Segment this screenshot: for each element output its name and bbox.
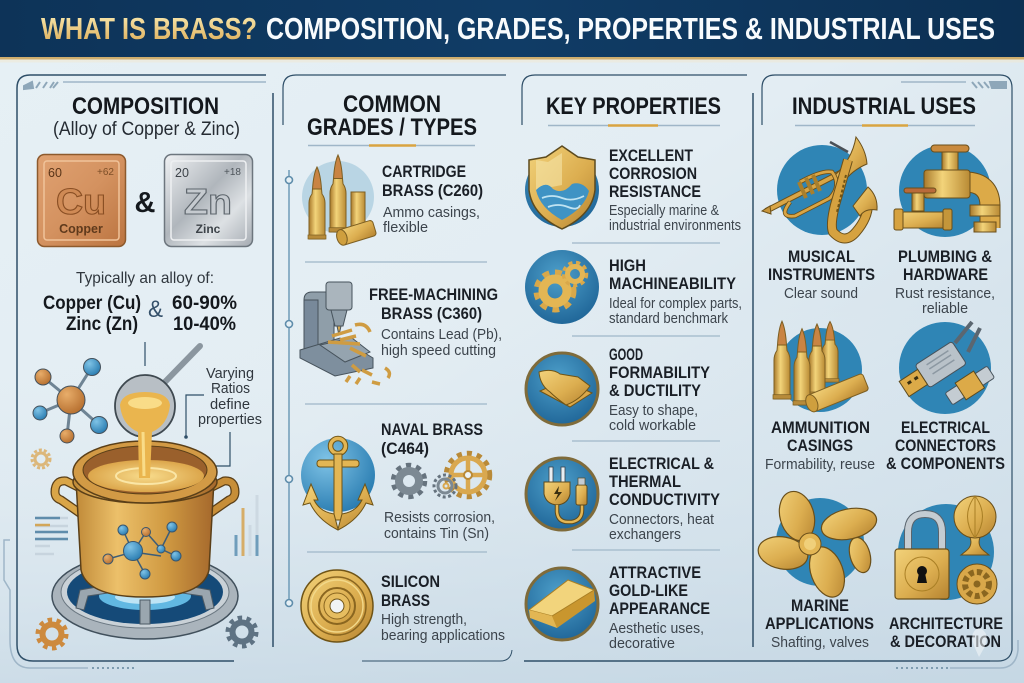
text: plumbing [895, 247, 995, 317]
text: ammunition [765, 418, 875, 473]
panel frame: uses [762, 75, 1018, 668]
text: cartridge brass: CARTRIDGE [382, 162, 466, 181]
text: conductivity: ELECTRICAL & [609, 454, 714, 473]
icon: ladle pouring [115, 346, 200, 478]
panel: composition [4, 75, 273, 668]
text: cartridge brass: flexible [383, 220, 428, 236]
text: free-machining brass: Contains Lead (Pb), [381, 327, 502, 343]
panel frame: composition [4, 75, 273, 668]
text: high machineability: Ideal for complex parts, [609, 296, 742, 312]
heading: common grades: GRADES / TYPES [307, 114, 477, 141]
text: silicon brass: BRASS [381, 591, 430, 610]
text: gold-like appearance: Aesthetic uses, [609, 621, 704, 637]
icon: plumbing [894, 145, 1000, 237]
element tile: zinc: +18 [224, 167, 241, 178]
text: corrosion resistance: EXCELLENT [609, 146, 694, 165]
heading: industrial uses: INDUSTRIAL USES [792, 93, 976, 120]
icon: silicon brass disc [301, 570, 373, 642]
text: architecture [889, 614, 1003, 651]
element tile: zinc: 20 [175, 166, 189, 180]
text: high machineability [609, 256, 742, 327]
text: cartridge brass: BRASS (C260) [382, 181, 483, 200]
panel frame: grades [283, 75, 512, 661]
heading: key properties: KEY PROPERTIES [546, 93, 721, 120]
text: typical alloy: & [148, 296, 163, 323]
text: marine: MARINE [791, 596, 849, 615]
icon: naval gears [394, 454, 490, 497]
text: plumbing: reliable [922, 301, 968, 317]
element tile: zinc [164, 154, 252, 246]
text: corrosion resistance: industrial environments [609, 218, 741, 234]
text: silicon brass [381, 572, 505, 644]
element tile: copper [38, 154, 126, 246]
element tile: copper: Cu [56, 181, 106, 222]
text: formability: cold workable [609, 418, 696, 434]
text: gold-like appearance [609, 563, 710, 652]
text: plumbing: Rust resistance, [895, 286, 995, 302]
ampersand: & [135, 187, 156, 219]
text: formability: & DUCTILITY [609, 381, 702, 400]
annotation: varying ratios: define [210, 396, 250, 413]
text: gold-like appearance: GOLD-LIKE [609, 581, 688, 600]
annotation: varying ratios: Ratios [211, 380, 250, 397]
text: musical instruments [768, 247, 875, 302]
text: formability: GOOD [609, 345, 643, 364]
text: electrical connectors: & COMPONENTS [886, 454, 1005, 473]
text: marine [765, 596, 874, 651]
text: musical instruments: MUSICAL [788, 247, 855, 266]
subheading: alloy: (Alloy of Copper & Zinc) [53, 119, 240, 140]
text: silicon brass: High strength, [381, 612, 467, 628]
text: high machineability: standard benchmark [609, 311, 729, 327]
icon: formability sheet [526, 353, 598, 425]
text: conductivity [609, 454, 721, 543]
text: silicon brass: bearing applications [381, 628, 505, 644]
text: high machineability: HIGH [609, 256, 646, 275]
title banner: WHAT IS BRASS? [41, 11, 257, 46]
pointer line [144, 342, 146, 366]
text: electrical connectors [886, 418, 1005, 473]
heading: common grades [307, 91, 477, 146]
element tile: copper: +62 [97, 167, 114, 178]
text: conductivity: Connectors, heat [609, 512, 714, 528]
watermark [972, 628, 987, 657]
text: high machineability: MACHINEABILITY [609, 274, 737, 293]
text: ammunition: CASINGS [787, 436, 853, 455]
text: conductivity: exchangers [609, 527, 681, 543]
text: plumbing: HARDWARE [903, 265, 988, 284]
text: corrosion resistance [609, 146, 741, 234]
icon: anchor [301, 438, 375, 530]
text: corrosion resistance: Especially marine & [609, 203, 719, 219]
text: naval brass: Resists corrosion, [384, 510, 495, 526]
text: corrosion resistance: CORROSION [609, 164, 697, 183]
text: naval brass: contains Tin (Sn) [384, 526, 489, 542]
panel: industrial uses [756, 75, 1018, 668]
icon: cartridge bullets [302, 155, 377, 247]
text: typical alloy: 60-90% [172, 293, 237, 314]
text: typical alloy [43, 270, 237, 335]
text: ammunition: Formability, reuse [765, 457, 875, 473]
text: formability: FORMABILITY [609, 363, 711, 382]
text: electrical connectors: ELECTRICAL [901, 418, 990, 437]
text: conductivity: THERMAL [609, 472, 681, 491]
heading: common grades: COMMON [343, 91, 441, 118]
text: marine: Shafting, valves [771, 635, 869, 651]
text: formability [609, 345, 711, 434]
annotation: varying ratios: Varying [206, 365, 254, 382]
icon: molecule [33, 358, 108, 443]
icon: machineability gears [525, 250, 599, 324]
element tile: copper: Copper [59, 222, 103, 236]
text: free-machining brass: BRASS (C360) [381, 304, 482, 323]
text: typical alloy: Typically an alloy of: [76, 270, 214, 287]
text: naval brass: NAVAL BRASS [381, 420, 483, 439]
text: plumbing: PLUMBING & [898, 247, 992, 266]
text: formability: Easy to shape, [609, 403, 698, 419]
text: gold-like appearance: APPEARANCE [609, 599, 710, 618]
text: free-machining brass: FREE-MACHINING [369, 285, 498, 304]
icon: electrical connectors [896, 322, 996, 414]
element tile: zinc: Zinc [196, 222, 221, 236]
text: gold-like appearance: decorative [609, 636, 675, 652]
text: musical instruments: INSTRUMENTS [768, 265, 875, 284]
text: corrosion resistance: RESISTANCE [609, 182, 701, 201]
icon: pot with molten brass [55, 441, 235, 597]
text: free-machining brass: high speed cutting [381, 343, 496, 359]
text: ammunition: AMMUNITION [771, 418, 870, 437]
text: musical instruments: Clear sound [784, 286, 858, 302]
panel: key properties [522, 75, 990, 661]
decorative mini charts [35, 495, 257, 556]
icon: lock and decorative hardware [895, 496, 997, 604]
icon: gold bar [526, 568, 598, 640]
annotation: varying ratios [184, 365, 262, 466]
text: gold-like appearance: ATTRACTIVE [609, 563, 701, 582]
icon: electric plug [526, 458, 598, 530]
icon: corrosion shield [525, 146, 599, 229]
icon: propeller [756, 487, 880, 602]
element tile: copper: 60 [48, 166, 62, 180]
element tile: zinc: Zn [184, 181, 232, 222]
icon: gears [32, 450, 256, 648]
text: typical alloy: Zinc (Zn) [66, 314, 138, 335]
text: architecture: & DECORATION [890, 632, 1001, 651]
text: cartridge brass: Ammo casings, [383, 205, 480, 221]
text: silicon brass: SILICON [381, 572, 440, 591]
icon: musical instruments [762, 137, 877, 238]
annotation: varying ratios: properties [198, 411, 262, 428]
text: conductivity: CONDUCTIVITY [609, 490, 721, 509]
title banner [0, 0, 1024, 62]
panel frame: properties [522, 75, 990, 661]
text: electrical connectors: CONNECTORS [895, 436, 996, 455]
text: naval brass: (C464) [381, 439, 429, 458]
text: typical alloy: 10-40% [173, 314, 236, 335]
icon: ammunition casings [773, 321, 869, 414]
text: marine: APPLICATIONS [765, 614, 874, 633]
heading: composition: COMPOSITION [72, 93, 219, 120]
text: naval brass [381, 420, 495, 542]
text: cartridge brass [382, 162, 483, 236]
text: free-machining brass [369, 285, 502, 359]
text: typical alloy: Copper (Cu) [43, 293, 141, 314]
text: architecture: ARCHITECTURE [889, 614, 1003, 633]
icon: molecule on pot [103, 522, 181, 579]
panel: common grades [283, 75, 512, 661]
icon: machining press [300, 282, 389, 384]
icon: burner [52, 553, 238, 639]
